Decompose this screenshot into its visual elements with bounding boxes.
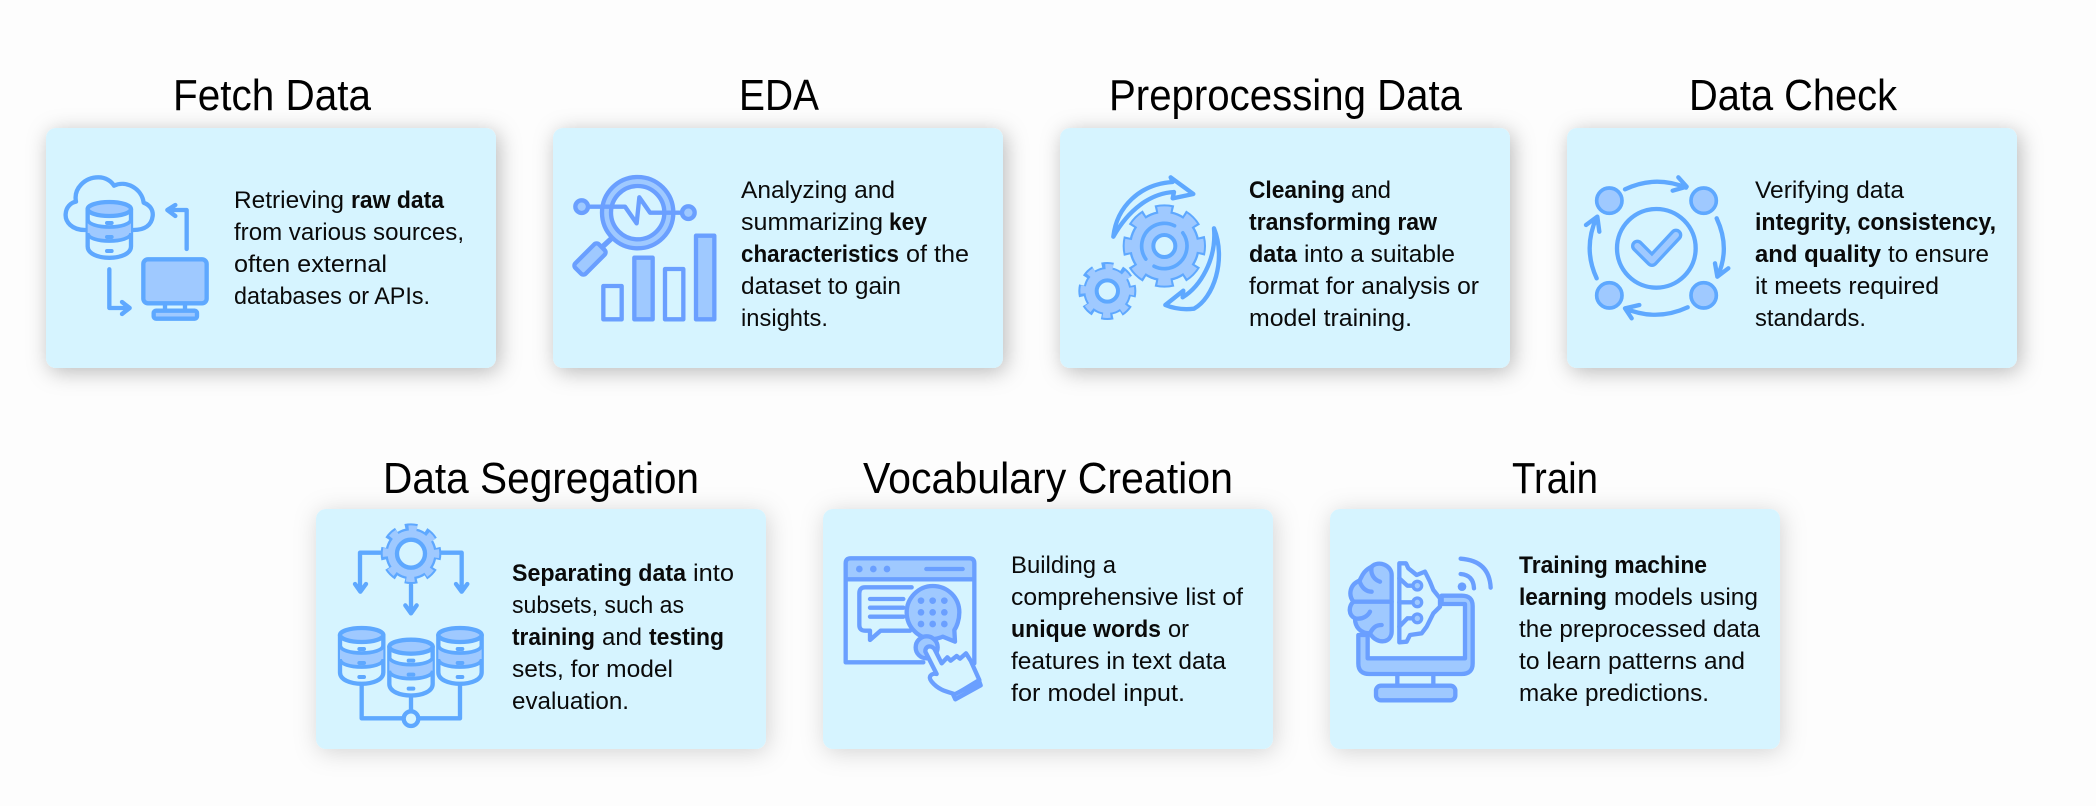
description text: subsets, such as xyxy=(512,592,684,619)
description text: raw data xyxy=(351,187,445,214)
heading: Preprocessing Data: Preprocessing Data xyxy=(1109,71,1462,120)
description text: Separating data xyxy=(512,560,687,587)
icon: cloud database and computer xyxy=(66,177,207,319)
description text: databases or APIs. xyxy=(234,283,430,310)
description text: or xyxy=(1168,616,1189,643)
description text: format for analysis or xyxy=(1249,273,1479,300)
heading: EDA: EDA xyxy=(739,71,820,120)
description text: transforming raw xyxy=(1249,209,1437,236)
description text: Verifying data xyxy=(1755,177,1905,204)
description text: it meets required xyxy=(1755,273,1939,300)
description text xyxy=(1011,552,1243,707)
description text: models using xyxy=(1614,584,1758,611)
description text: model training. xyxy=(1249,305,1412,332)
description text: comprehensive list of xyxy=(1011,584,1243,611)
description text: key xyxy=(889,209,928,236)
description text xyxy=(741,177,969,332)
card background xyxy=(1330,509,1780,749)
description text: into a suitable xyxy=(1304,241,1455,268)
description text: dataset to gain xyxy=(741,273,901,300)
card background xyxy=(553,128,1003,368)
description text: make predictions. xyxy=(1519,680,1709,707)
description text: learning xyxy=(1519,584,1607,611)
description text: of the xyxy=(906,241,969,268)
panel: EDA xyxy=(553,71,1003,368)
description text: characteristics xyxy=(741,241,899,268)
description text: evaluation. xyxy=(512,688,629,715)
panel: Data Check xyxy=(1567,71,2017,368)
panel: Train xyxy=(1330,454,1780,749)
icon: gears with rotating arrows xyxy=(1079,177,1219,320)
description text: often external xyxy=(234,251,387,278)
description text: for model input. xyxy=(1011,680,1185,707)
card background xyxy=(823,509,1273,749)
description text: to learn patterns and xyxy=(1519,648,1745,675)
description text xyxy=(1755,177,1996,332)
description text: and quality xyxy=(1755,241,1882,268)
icon: gear splitting into databases xyxy=(340,523,482,726)
description text: data xyxy=(1249,241,1298,268)
heading: Train: Train xyxy=(1512,454,1598,503)
description text: Retrieving xyxy=(234,187,344,214)
panel: Data Segregation xyxy=(316,454,766,749)
description text xyxy=(1519,552,1761,707)
description text: training xyxy=(512,624,595,651)
description text: from various sources, xyxy=(234,219,464,246)
panel: Fetch Data xyxy=(46,71,496,368)
card background xyxy=(46,128,496,368)
description text: sets, for model xyxy=(512,656,673,683)
description text xyxy=(234,187,464,310)
card background xyxy=(1060,128,1510,368)
description text xyxy=(1249,177,1479,332)
icon: check mark in cycle of nodes xyxy=(1586,177,1728,318)
description text: features in text data xyxy=(1011,648,1227,675)
heading: Data Check: Data Check xyxy=(1689,71,1898,120)
heading: Data Segregation: Data Segregation xyxy=(383,454,699,503)
card background xyxy=(1567,128,2017,368)
description text: insights. xyxy=(741,305,828,332)
description text xyxy=(512,560,734,715)
description text: to ensure xyxy=(1888,241,1989,268)
description text: and xyxy=(1351,177,1391,204)
description text: the preprocessed data xyxy=(1519,616,1761,643)
description text: unique words xyxy=(1011,616,1161,643)
icon: AI brain on monitor with wifi xyxy=(1350,559,1491,700)
icon: magnifier over bar chart xyxy=(573,177,714,319)
card background xyxy=(316,509,766,749)
icon: browser window with chat bubbles and pointer xyxy=(846,558,981,699)
description text: standards. xyxy=(1755,305,1866,332)
description text: and xyxy=(602,624,642,651)
panel: Preprocessing Data xyxy=(1060,71,1510,368)
description text: summarizing xyxy=(741,209,883,236)
description text: Training machine xyxy=(1519,552,1707,579)
description text: testing xyxy=(649,624,724,651)
description text: Cleaning xyxy=(1249,177,1345,204)
panel: Vocabulary Creation xyxy=(823,454,1273,749)
heading: Fetch Data: Fetch Data xyxy=(173,71,371,120)
description text: Building a xyxy=(1011,552,1117,579)
description text: into xyxy=(693,560,734,587)
description text: integrity, consistency, xyxy=(1755,209,1996,236)
heading: Vocabulary Creation: Vocabulary Creation xyxy=(863,454,1233,503)
description text: Analyzing and xyxy=(741,177,895,204)
